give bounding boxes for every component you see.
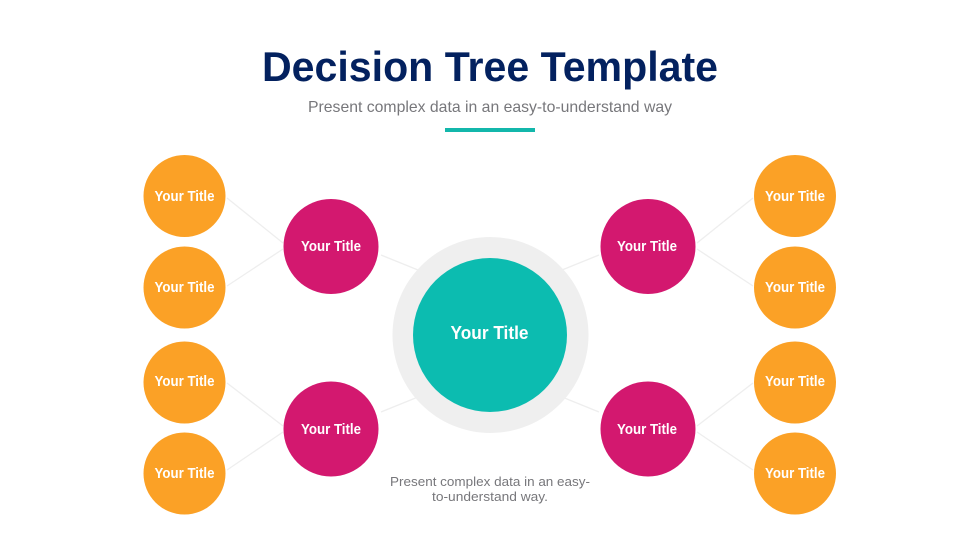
right leaf node 1 — [754, 155, 836, 237]
central node — [392, 237, 588, 433]
subtitle: Present complex data in an easy-to-understand way — [308, 99, 672, 116]
right leaf node 4: Your Title — [765, 465, 825, 482]
right leaf node 2 — [754, 246, 836, 328]
title underline — [445, 128, 535, 132]
left lower branch node: Your Title — [301, 421, 361, 438]
right leaf node 4 — [754, 432, 836, 514]
left leaf node 3: Your Title — [154, 373, 214, 390]
caption text — [390, 474, 590, 504]
left leaf node 2 — [144, 246, 226, 328]
right leaf node 3 — [754, 342, 836, 424]
right leaf node 2: Your Title — [765, 279, 825, 296]
left leaf node 2: Your Title — [154, 279, 214, 296]
right lower branch node — [600, 382, 696, 476]
left leaf node 4 — [144, 432, 226, 514]
right lower branch node: Your Title — [617, 421, 677, 438]
left leaf node 4: Your Title — [154, 465, 214, 482]
right leaf node 1: Your Title — [765, 188, 825, 205]
title: Decision Tree Template — [262, 43, 718, 90]
connector lines — [227, 198, 753, 470]
left upper branch node — [284, 199, 378, 294]
left lower branch node — [284, 382, 378, 476]
left upper branch node: Your Title — [301, 238, 361, 255]
right upper branch node: Your Title — [617, 238, 677, 255]
left leaf node 1 — [144, 155, 226, 237]
right upper branch node — [600, 199, 696, 294]
right leaf node 3: Your Title — [765, 373, 825, 390]
left leaf node 1: Your Title — [154, 188, 214, 205]
left leaf node 3 — [144, 342, 226, 424]
caption text: to-understand way. — [432, 489, 548, 504]
central node: Your Title — [450, 323, 528, 343]
caption text: Present complex data in an easy- — [390, 474, 590, 489]
